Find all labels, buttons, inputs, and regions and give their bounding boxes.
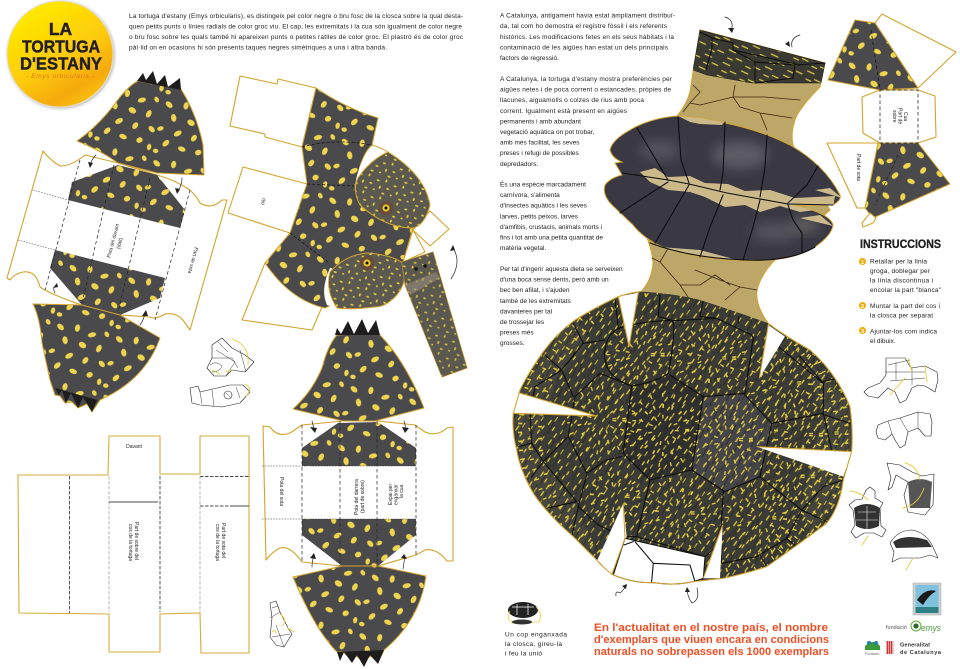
white flap upper — [875, 14, 956, 88]
lower head — [324, 268, 338, 309]
paragraph: habitat: A Catalunya, la tortuga d'estany mostra preferències per — [500, 76, 673, 83]
step 3: el dibuix. — [870, 338, 896, 345]
head and body cut-out — [228, 76, 467, 377]
icon: shell glue — [508, 602, 541, 624]
white flaps — [230, 76, 316, 147]
paragraph: feeding: davanteres per tal — [500, 308, 553, 315]
logo: generalitat — [886, 641, 942, 656]
label: pota del darrera: (part de sobre) — [360, 480, 366, 513]
front leg cut-out — [7, 71, 227, 412]
step 3 — [859, 327, 937, 345]
upper band — [68, 165, 185, 228]
paragraph: diet: carnívora, s'alimenta — [500, 192, 560, 199]
lower foot — [33, 304, 160, 412]
right column text — [500, 13, 675, 347]
paragraph: distribution: da, tal com ho demostra el registre fòssil i els referents — [500, 23, 668, 30]
small leg sketch — [270, 601, 294, 647]
intro text: La tortuga d'estany (Emys orbicularis), es distingeix pel color negre o bru fosc de la closca sobre la qual desta- — [129, 13, 463, 20]
label: espai: Espai per — [388, 484, 394, 505]
paragraph: habitat: corrent. Igualment està present en aigües — [500, 108, 628, 115]
top dark scutes — [693, 30, 825, 83]
label: part de sota: Part de sota — [855, 154, 861, 181]
radial yellow markings — [514, 292, 852, 580]
wedge cuts — [513, 293, 852, 578]
label: part de sobre: Part de sobre del — [133, 522, 139, 560]
plastron — [604, 116, 840, 260]
label: pota del darrera: Pota del darrera — [354, 479, 360, 515]
step 2 — [859, 302, 940, 320]
tail cut-out — [827, 14, 956, 227]
sketch: finished turtle — [890, 530, 938, 570]
paragraph: distribution — [500, 13, 675, 62]
label: cua: Part de — [896, 108, 902, 124]
title badge: D'ESTANY — [20, 54, 102, 74]
highlight statement: En l'actualitat en el nostre país, el nombre — [594, 622, 828, 634]
carapace — [512, 291, 853, 585]
step 3: Ajuntar-los com indica — [870, 329, 937, 336]
paragraph: habitat: permanents i amb abundant — [500, 118, 581, 125]
logo: fundacio emys: emys — [921, 623, 941, 633]
paragraph: distribution: contaminació de les aigües han estat un dels principals — [500, 44, 669, 51]
white tail-notch panel — [613, 538, 705, 584]
step 1: la línia discontinua i — [870, 278, 933, 285]
scute lines — [604, 321, 674, 386]
dark upper triangle — [828, 20, 918, 90]
upper foot — [293, 333, 424, 421]
highlight statement — [594, 622, 829, 658]
paragraph: distribution: factors de regressió. — [500, 55, 559, 62]
intro text — [129, 13, 464, 52]
paragraph: feeding: preses més — [500, 330, 534, 337]
logo: generalitat: Generalitat — [900, 642, 930, 648]
top arrows — [725, 17, 800, 47]
paragraph: habitat — [500, 76, 673, 168]
label: espai: enganxar — [394, 484, 400, 505]
logo: forestal: Fundació — [865, 652, 879, 656]
label: front leg: Pota del davant — [106, 223, 121, 259]
paragraph: feeding: bec ben afilat, i s'ajuden — [500, 287, 570, 294]
paragraph: habitat: amb més facilitat, les seves — [500, 140, 580, 147]
central white — [862, 90, 936, 143]
plastron colouring — [640, 116, 842, 262]
logo: generalitat: de Catalunya — [900, 650, 942, 656]
paragraph: diet — [500, 180, 603, 252]
tan neck and plastron bridge — [640, 30, 830, 323]
tan panel lines — [652, 85, 800, 300]
paragraph: diet: fins i tot amb una petita quantitat de — [500, 234, 603, 242]
dark spotted body — [265, 88, 413, 308]
upper head — [355, 152, 430, 228]
paragraph: habitat: llacunes, aiguamolls o colzes de rius amb poca — [500, 97, 644, 104]
white flap lower — [827, 143, 878, 208]
lower band — [302, 519, 416, 566]
label: part de sota: cos de la tortuga — [214, 524, 220, 561]
title badge: - Emys orbicularis - — [26, 73, 95, 80]
label: part de sota: Part de sota del — [220, 523, 226, 558]
label: part de sobre: cos de la tortuga — [127, 524, 133, 561]
paragraph: habitat: aigües netes i de poca corrent o estancades, pròpies de — [500, 87, 671, 94]
instructions — [859, 237, 942, 345]
glue note — [505, 602, 567, 658]
white flap outline — [7, 151, 227, 330]
intro text: quen petits punts o línies radials de color groc viu. El cap, les extremitats i la cua són igualment de color negre — [129, 24, 462, 30]
paragraph: diet: matèria vegetal. — [500, 245, 546, 252]
upper band — [302, 422, 416, 466]
paragraph: feeding: Per tal d'ingerir aquesta dieta se serveixen — [500, 266, 623, 273]
paragraph: habitat: preses i refugi de possibles — [500, 150, 580, 157]
arrows — [54, 155, 182, 325]
curved arrow — [451, 248, 457, 279]
turtle shell cut-out — [503, 17, 857, 603]
title badge: TORTUGA — [22, 36, 100, 56]
sketch: shell fitting — [887, 463, 934, 515]
step 1: groga, doblegar per — [870, 268, 931, 275]
assembly sketches — [849, 358, 938, 570]
bottom arrows — [616, 585, 698, 603]
body template — [18, 436, 249, 653]
white flap outline — [263, 421, 453, 566]
glue note: Un cop enganxada — [505, 632, 567, 638]
lower foot — [293, 566, 426, 662]
paragraph: feeding — [500, 266, 623, 347]
label: front leg: (dalt) — [116, 237, 125, 250]
paragraph: distribution: A Catalunya, antigament havia estat àmpliament distribuï- — [500, 13, 675, 20]
step 1: encolar la part "blanca" — [870, 287, 942, 294]
paragraph: feeding: d'una boca sense dents, però amb un — [500, 277, 609, 284]
highlight statement: naturals no sobrepassen els 1000 exemplars — [594, 646, 829, 658]
title badge: LA — [49, 19, 73, 39]
step 2: Muntar la part del cos i — [870, 303, 940, 310]
paragraph: feeding: també de les extremitats — [500, 298, 572, 305]
logo: fundacio emys: fundació — [886, 625, 907, 631]
lower band — [50, 250, 165, 315]
intro text: o bru fosc sobre les quals també hi apareixen punts o petites ratlles de color groc. El plastró és de color groc — [129, 34, 464, 41]
plastron lines — [620, 117, 833, 260]
paragraph: habitat: vegetació aquàtica on pot trobar, — [500, 129, 595, 136]
label: cua: sobre — [891, 110, 897, 123]
logo: fundacio emys — [886, 621, 941, 633]
dark lower triangle — [865, 143, 950, 218]
lower eye — [360, 256, 374, 270]
paragraph: diet: És una espècie marcadament — [500, 180, 586, 188]
step 2: 2 — [861, 304, 864, 310]
arrows — [312, 421, 405, 569]
intro text: pàl·lid on en ocasions hi són presents taques negres simètriques a una i altra banda. — [129, 44, 387, 52]
sketch: turtle from above — [849, 487, 886, 545]
back leg cut-out — [262, 319, 453, 667]
step 1: 1 — [861, 260, 864, 266]
glue note: i feu la unió — [505, 650, 542, 658]
label: davant: Davant — [126, 444, 143, 450]
heading: INSTRUCCIONS — [860, 237, 941, 251]
logos — [865, 583, 942, 656]
neck strip — [402, 252, 467, 377]
upper eye — [379, 201, 393, 215]
paragraph: feeding: grosses. — [500, 340, 525, 347]
label: underside: Part de sota — [186, 246, 199, 274]
title badge — [7, 1, 113, 107]
logo: bird photo — [913, 583, 941, 615]
label: pota del sota: Pota del sota — [278, 477, 284, 506]
paragraph: distribution: històrics. Les modificacions fetes en els seus hàbitats i la — [500, 34, 674, 41]
label: neck flap: ojo — [259, 197, 267, 206]
step 3: 3 — [861, 329, 864, 335]
label: espai: la cua — [399, 484, 405, 498]
paragraph: diet: d'insectes aquàtics i les seves — [500, 203, 588, 210]
step 1 — [859, 258, 942, 294]
top scute lines — [700, 32, 825, 83]
step 2: la closca per separat — [870, 313, 933, 320]
paragraph: feeding: de trossejar les — [500, 319, 545, 326]
sketch: assembled body — [876, 412, 932, 448]
label: cua: Cua — [902, 112, 908, 121]
glue note: la closca, gireu-la — [505, 641, 562, 648]
upper foot — [77, 81, 204, 175]
paragraph: habitat: depredadors. — [500, 161, 538, 168]
paragraph: diet: larves, petits peixos, larves — [500, 213, 579, 220]
highlight statement: d'exemplars que viuen encara en condicions — [594, 634, 829, 646]
upper claws — [137, 71, 181, 90]
paragraph: diet: d'amfibis, crustacis, animals morts i — [500, 224, 602, 231]
folding sketches — [190, 338, 254, 407]
sketch: body parts — [864, 358, 938, 403]
step 1: Retallar per la línia — [870, 258, 927, 266]
